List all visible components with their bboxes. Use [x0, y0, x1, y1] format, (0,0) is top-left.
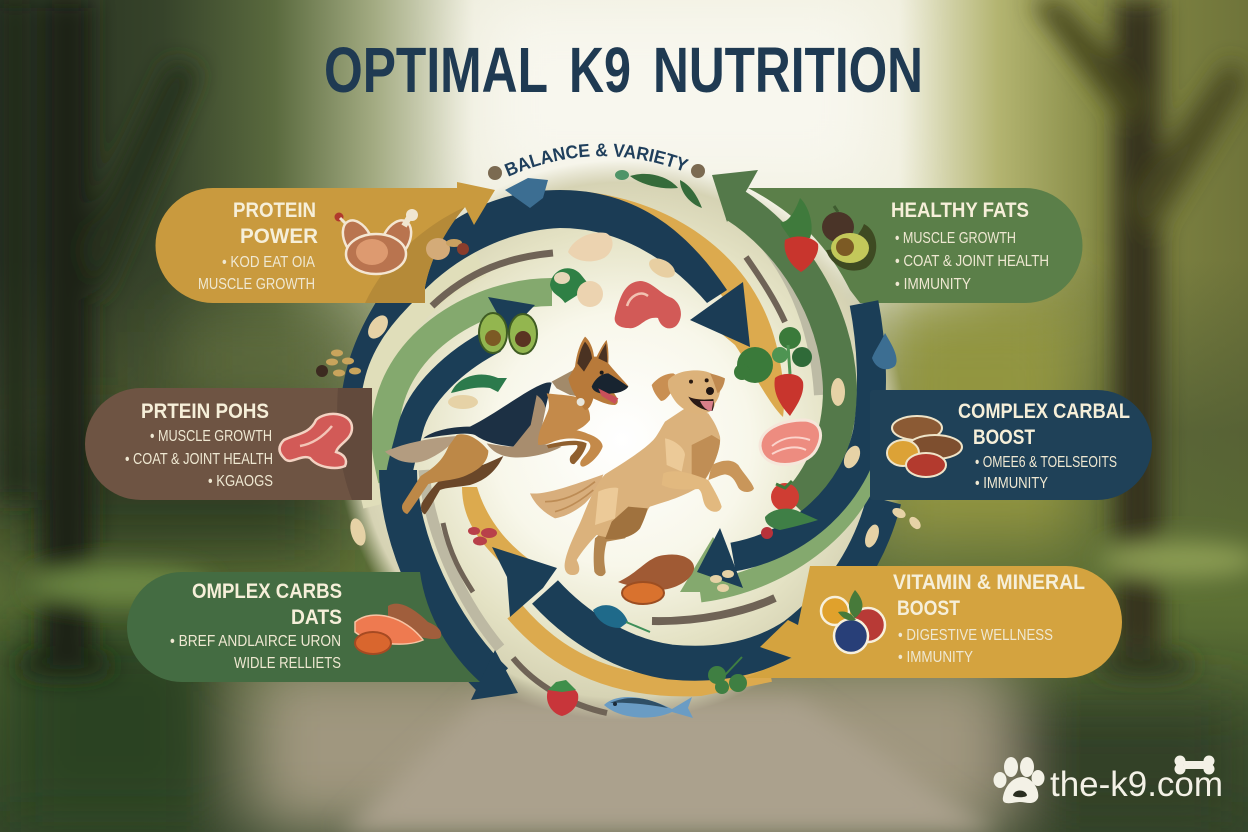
arrow: outer navy top	[342, 190, 750, 392]
rear thigh	[402, 434, 488, 514]
muzzle	[592, 373, 628, 394]
belly shadow	[605, 507, 648, 539]
icon: red beans	[468, 527, 497, 546]
swooshes: brown accents	[432, 253, 785, 713]
arrow: cream band	[367, 262, 480, 505]
front leg far	[547, 441, 587, 464]
panel: vitamin and mineral boost: • DIGESTIVE WELLNESS	[898, 627, 1053, 644]
icon: salmon and sweet potato	[355, 604, 441, 654]
arrow: navy bottom	[492, 500, 884, 663]
icon: mixed berries	[821, 590, 885, 653]
panel: vitamin and mineral boost	[745, 566, 1122, 678]
panel: vitamin and mineral boost: BOOST	[897, 597, 960, 620]
arrow: navy inner left	[398, 297, 535, 700]
panel: complex carbs oats: • BREF ANDLAIRCE URON	[170, 633, 341, 650]
heading: balance and variety: BALANCE & VARIETY	[504, 144, 689, 176]
highlights	[595, 438, 685, 525]
panel: protein power: • KOD EAT OIA	[222, 254, 316, 271]
panel: vitamin and mineral boost: VITAMIN & MINERAL	[893, 571, 1085, 594]
panel: protein pohs: PRTEIN POHS	[141, 400, 269, 423]
arrows right side	[680, 170, 877, 592]
icon: blue drop leaf	[872, 333, 897, 369]
near front leg	[662, 471, 722, 512]
far rear leg	[594, 512, 645, 576]
panel: protein power: MUSCLE GROWTH	[198, 276, 315, 293]
logo: the-k9.com: the-k9.com	[1050, 765, 1223, 804]
title: NUTRITION	[653, 34, 923, 106]
illustration: german shepherd	[385, 337, 628, 514]
panel: protein pohs: • MUSCLE GROWTH	[150, 428, 272, 445]
ear left	[652, 373, 678, 401]
front leg near	[539, 428, 603, 467]
icon: walnut and berry	[426, 238, 469, 260]
icon: chicken breast	[568, 232, 613, 261]
icon: paw	[994, 757, 1044, 803]
chest shadow	[692, 435, 720, 483]
arrow: outer green right	[712, 170, 840, 505]
icon: leaf and nut left	[448, 374, 507, 409]
logo: the-k9.com	[994, 756, 1223, 804]
icon: roast chicken	[334, 209, 418, 274]
icon: green pepper and nut	[550, 268, 603, 307]
ear right	[710, 373, 725, 393]
arrow: orange bottom left	[462, 487, 770, 686]
icons: food around ring	[316, 170, 923, 718]
panel: complex carbal boost: COMPLEX CARBAL	[958, 400, 1130, 423]
panel: complex carbs oats	[127, 572, 480, 682]
far rear leg	[421, 456, 503, 514]
icon: strawberry and avocado	[781, 198, 876, 272]
title	[324, 34, 923, 106]
center glow	[337, 160, 907, 720]
head	[568, 337, 628, 410]
panel: protein pohs: • COAT & JOINT HEALTH	[125, 451, 273, 468]
icon: salmon steak	[760, 420, 821, 464]
icon: nuts scattered	[348, 312, 923, 549]
panel: protein power: PROTEIN	[233, 199, 316, 222]
panel: protein pohs: • KGAOGS	[208, 473, 273, 490]
icon: tomato and greens	[761, 481, 818, 539]
panel: healthy fats: HEALTHY FATS	[891, 199, 1029, 222]
icon: nut	[646, 254, 678, 282]
panel: complex carbal boost: • IMMUNITY	[975, 475, 1048, 492]
icon: blue fish tail	[505, 178, 548, 208]
icon: green sprig top	[615, 170, 702, 208]
panel: protein power	[155, 182, 495, 303]
icon: cilantro	[708, 657, 747, 694]
head	[668, 370, 721, 414]
panel: complex carbs oats: WIDLE RELLIETS	[234, 655, 341, 672]
tail	[385, 436, 457, 463]
title: K9	[569, 34, 631, 106]
icon: seeds left	[316, 350, 361, 377]
icon: blue leaf bottom	[593, 605, 650, 632]
panel: complex carbal boost: BOOST	[973, 426, 1035, 449]
icon: sweet potato	[618, 554, 694, 604]
illustration: golden retriever	[530, 370, 754, 576]
panel: protein pohs	[85, 388, 372, 500]
mouth	[688, 397, 714, 411]
panel: healthy fats	[748, 188, 1082, 303]
icon: steak	[280, 414, 352, 468]
chest	[538, 393, 590, 445]
icon: oat seeds	[710, 570, 734, 592]
icon: strawberry	[547, 680, 578, 716]
panel: complex carbal boost: • OMEE6 & TOELSEOITS	[975, 454, 1117, 471]
neck mane	[552, 370, 580, 397]
saddle	[423, 382, 552, 447]
collar tag	[577, 398, 585, 406]
panel: healthy fats: • MUSCLE GROWTH	[895, 230, 1016, 247]
grey belly	[487, 395, 562, 457]
panel: complex carbs oats: DATS	[291, 606, 342, 629]
panel: complex carbs oats: OMPLEX CARBS	[192, 580, 342, 603]
body	[565, 408, 720, 575]
panel: healthy fats: • IMMUNITY	[895, 276, 971, 293]
arrow: light green inner left	[385, 292, 552, 480]
icon: fish	[604, 697, 693, 718]
panel: complex carbal boost	[870, 390, 1152, 500]
panel: healthy fats: • COAT & JOINT HEALTH	[895, 253, 1049, 270]
arrow: orange top right	[555, 190, 784, 417]
tail	[530, 474, 603, 518]
icon: avocado halves	[479, 313, 537, 354]
arrow: light green right	[680, 452, 877, 592]
icon: steak center	[615, 281, 681, 328]
panel: protein power: POWER	[240, 225, 318, 248]
icon: radish and greens	[734, 327, 812, 416]
far front leg	[708, 461, 754, 492]
arrow: navy right inner	[697, 303, 871, 588]
arrow: grey band right	[735, 214, 820, 395]
panel: vitamin and mineral boost: • IMMUNITY	[898, 649, 973, 666]
arrows behind panels	[342, 190, 884, 700]
title: OPTIMAL	[324, 34, 548, 106]
icon: bone	[1174, 756, 1214, 774]
icon: legumes	[887, 416, 962, 477]
